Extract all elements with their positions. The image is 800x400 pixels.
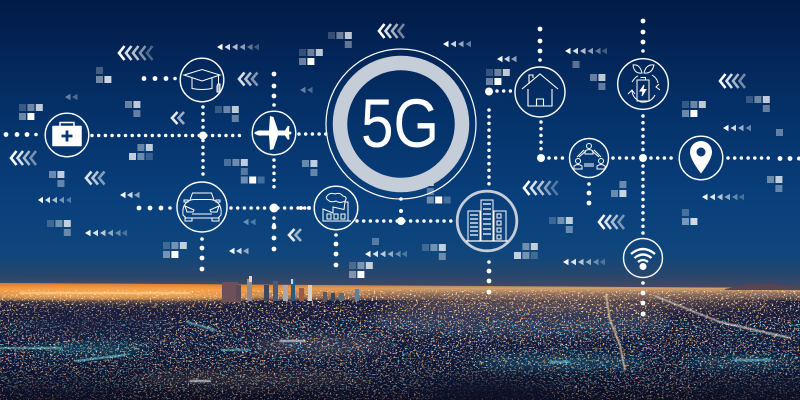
icon: factory — [314, 186, 358, 230]
icon: location pin — [679, 136, 723, 180]
icon: city buildings — [457, 191, 517, 251]
low frequency glow patches — [0, 290, 800, 386]
5G central badge — [326, 49, 476, 199]
icon: connected people — [570, 138, 608, 178]
chevron arrow groups — [11, 24, 745, 241]
icon: graduation cap — [180, 58, 224, 102]
background: night sky — [0, 0, 800, 290]
icon: wifi — [624, 238, 662, 278]
triangle arrow rows — [38, 41, 751, 265]
light speckle — [0, 290, 800, 400]
5G label: 5G — [361, 85, 439, 162]
icon: medical kit — [45, 113, 89, 157]
dotted network lines — [4, 19, 800, 316]
bright streets — [0, 293, 790, 381]
city lights at night — [0, 276, 800, 400]
icon: green battery — [618, 59, 668, 109]
icon: house — [515, 67, 565, 117]
downtown skyline — [222, 276, 359, 302]
icon: airplane — [252, 111, 296, 155]
icon: car — [177, 182, 227, 232]
pixel square clusters — [19, 32, 783, 278]
